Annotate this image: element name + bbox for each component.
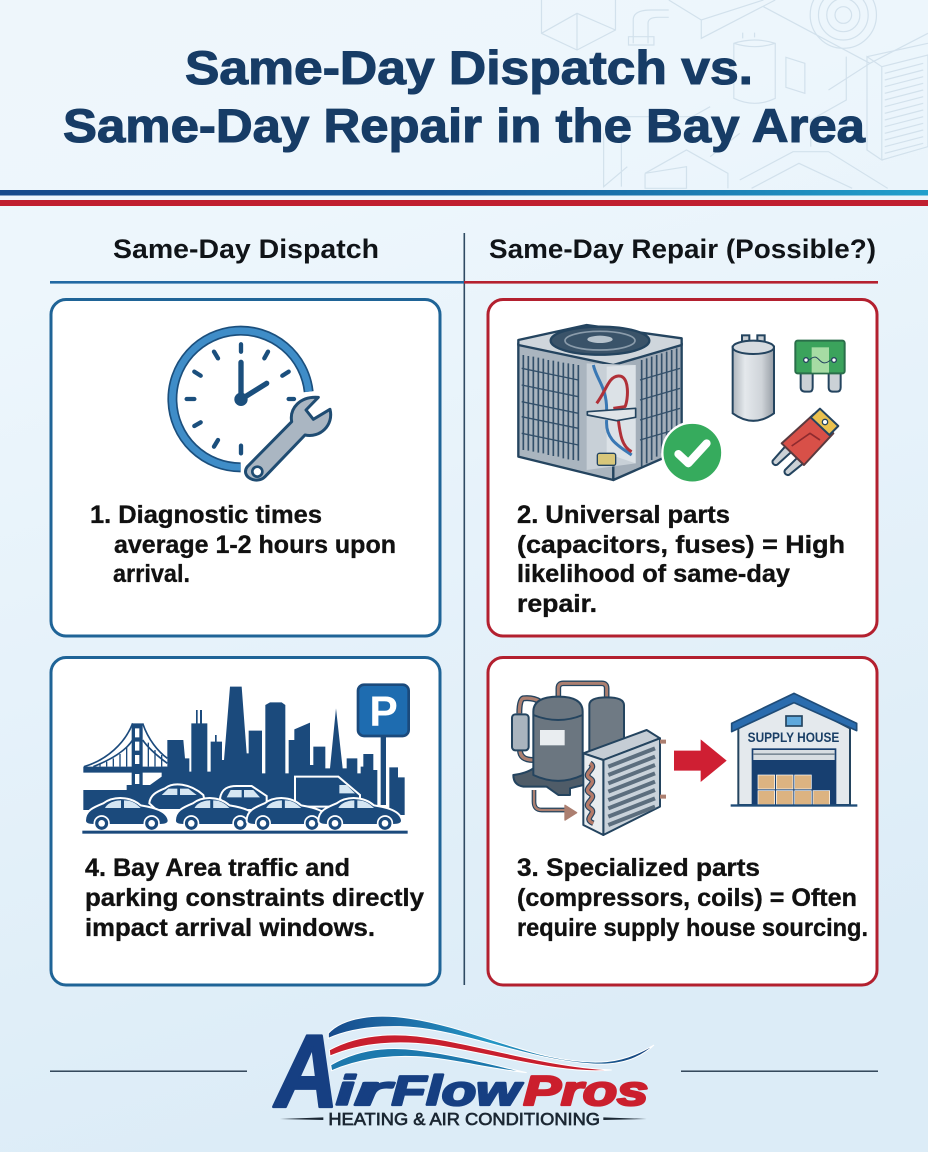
- text: point 3: 3. Specialized parts: [517, 854, 760, 882]
- logo wordmark: r: [354, 1067, 395, 1114]
- icon: supply house warehouse: [731, 693, 857, 807]
- text: point 2: 2. Universal parts: [517, 501, 730, 529]
- text: point 2: likelihood of same-day: [517, 560, 790, 588]
- text: point 4: [85, 854, 424, 942]
- panel 2: universal parts: [488, 300, 877, 636]
- panel 4: traffic and parking: [51, 658, 440, 985]
- text: point 1: [90, 501, 396, 588]
- logo wordmark: Flow: [392, 1067, 523, 1114]
- icon: coil: [583, 730, 666, 835]
- logo: Air Flow Pros: [272, 1014, 654, 1129]
- icon: supply house warehouse: SUPPLY HOUSE: [748, 729, 839, 745]
- logo wordmark: Pros: [523, 1067, 648, 1114]
- background line art: HVAC blueprint: [541, 0, 928, 188]
- text: point 3: (compressors, coils) = Often: [517, 884, 857, 912]
- icon: AC condenser unit: [518, 325, 682, 480]
- text: point 1: 1. Diagnostic times: [90, 501, 322, 529]
- logo swoosh: [328, 1016, 654, 1073]
- icon: capacitor: [733, 335, 774, 421]
- icon: green check badge: [662, 423, 722, 483]
- text: point 2: [517, 501, 845, 618]
- logo tagline: HEATING & AIR CONDITIONING: [328, 1109, 600, 1129]
- text: point 1: average 1-2 hours upon: [114, 531, 396, 559]
- text: point 2: repair.: [517, 590, 597, 618]
- text: point 2: (capacitors, fuses) = High: [517, 531, 845, 559]
- title: [63, 41, 866, 152]
- text: point 4: 4. Bay Area traffic and: [85, 854, 350, 882]
- icon: compressor: [512, 683, 624, 820]
- text: point 4: impact arrival windows.: [85, 914, 375, 942]
- logo wordmark: i: [336, 1067, 357, 1114]
- panel 3: specialized parts: [488, 658, 877, 985]
- text: point 4: parking constraints directly: [85, 884, 424, 912]
- title: Same-Day Dispatch vs.: [185, 41, 753, 94]
- icon: green blade fuse: [795, 341, 845, 392]
- column heading: same-day dispatch: Same-Day Dispatch: [113, 234, 379, 264]
- text: point 3: [517, 854, 868, 942]
- logo wordmark: [272, 1014, 648, 1129]
- logo wordmark: A: [272, 1014, 338, 1129]
- icon: red inline fuse: [773, 409, 838, 475]
- icon: clock and wrench: [172, 331, 331, 480]
- text: point 3: require supply house sourcing.: [517, 914, 868, 942]
- icon: city skyline, bridge, cars and parking sign: [82, 685, 409, 834]
- column heading: same-day repair: Same-Day Repair (Possible?): [489, 234, 876, 264]
- panel 1: diagnostic times: [51, 300, 440, 636]
- header stripes: [0, 190, 928, 206]
- icon: city skyline, bridge, cars and parking sign: P: [369, 688, 398, 736]
- arrow: red to supply house: [674, 739, 727, 782]
- title: Same-Day Repair in the Bay Area: [63, 99, 866, 152]
- text: point 1: arrival.: [113, 560, 190, 588]
